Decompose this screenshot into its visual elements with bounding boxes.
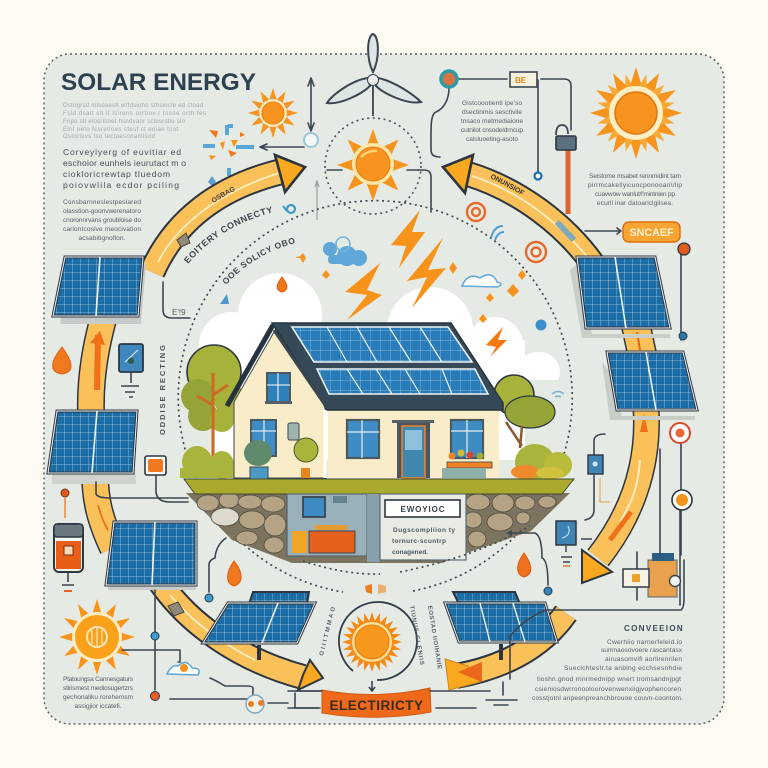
connector: top right ring and wires <box>431 71 571 180</box>
small label E: E'!9 <box>172 308 186 317</box>
text block: bottom-left caption: stirismest mediosugertzrs <box>63 685 134 692</box>
text block: right sun caption: cuavwow wanlut/l'mintnlen pp <box>595 191 675 198</box>
lightning bolts <box>345 210 507 357</box>
inner dashed arc left <box>303 561 380 574</box>
icon: concentric target center <box>526 242 546 262</box>
text block: convey: poiovwlila ecdor pciling <box>63 180 179 190</box>
text block: top right: tnsaco metmediaione <box>461 118 523 125</box>
basement caption <box>392 527 455 556</box>
arrow: right ribbon lower <box>582 408 648 583</box>
icon: wifi <box>552 392 564 397</box>
text block: convey: Corveyiyerg of euvitiar ed <box>63 147 181 157</box>
text block: intro: Fsld dsalt slt lt lsirens orrtiov r tssoe orth fes <box>63 111 206 117</box>
connector: top right ring and wires: BE <box>515 76 527 85</box>
text block: bottom-left caption: assigjior iccatefi. <box>74 703 122 710</box>
title: SOLAR ENERGY <box>61 69 256 96</box>
solar panel 6 <box>570 257 670 338</box>
icon: lower left drop <box>228 561 241 586</box>
outer dashed circle <box>178 201 572 592</box>
arrow: bottom right ribbon <box>445 613 566 690</box>
arrow: right ribbon between panels <box>636 326 642 354</box>
house <box>227 323 503 478</box>
roof solar panels lower <box>317 369 488 394</box>
solar panel 3 <box>106 522 196 590</box>
text block: top right <box>461 100 523 143</box>
icon: battery <box>54 489 83 591</box>
ground band <box>184 479 574 494</box>
rotated label: odise recting: ODDISE RECTING <box>158 345 167 435</box>
text block: conversion details: Cwerhiio narnerfeleid.io <box>607 639 682 646</box>
text block: description: Consbarnneslestpeslared <box>63 199 141 206</box>
text block: conversion details: Sueclchtestr.ta anblng ecchsesnhdie <box>564 665 682 672</box>
wires: banner sides <box>288 691 490 708</box>
text block: conversion details: csieniosdwrronooloorovenwenxiigjvophencoren <box>535 686 681 693</box>
arrow: left ribbon middle <box>95 473 113 548</box>
tree left <box>181 345 246 476</box>
bushes right <box>511 444 572 480</box>
roof <box>272 323 503 410</box>
solar panel 5 <box>445 592 557 660</box>
icon: right column orange node <box>672 490 692 510</box>
icon: connector and orange pipe <box>556 125 576 214</box>
door <box>392 420 434 478</box>
icon: bottom coupled dots <box>246 691 322 713</box>
icon: top-left sun <box>248 88 298 138</box>
arrow: top right ribbon: ONUNSIOF <box>491 174 525 194</box>
window left <box>251 420 276 456</box>
icon: connection ring and arrow <box>260 133 318 150</box>
meter <box>288 423 299 440</box>
icon: bottom sun ring <box>335 602 417 691</box>
text block: top right: cutnilot cnsodeldrncup <box>461 127 523 134</box>
text block: right sun caption: pirrmcakellyicuocponooan\/lip <box>588 182 682 189</box>
icon: left orange box <box>145 456 188 502</box>
text block: bottom-left caption: Ptatoungsa Cannesgaturs <box>63 676 134 683</box>
inner dashed arc right <box>400 526 530 572</box>
text block: description: olasstion-goonvwerenatoro <box>63 208 141 215</box>
icon: blue dot <box>536 320 546 330</box>
solar panel 1 <box>53 257 146 324</box>
window gable <box>265 373 292 404</box>
icon: right battery unit <box>623 510 680 605</box>
text block: right sun caption: Seistome msabet rennmidint tam <box>589 173 682 180</box>
flower box <box>442 450 492 478</box>
clouds behind house <box>199 273 560 460</box>
arrow: left ribbon upper <box>90 316 105 412</box>
icon: blue cloud with spiral <box>323 237 367 266</box>
text block: description <box>63 199 141 242</box>
basement caption: tornurc-scuntrp <box>392 538 446 545</box>
text block: intro: Ostnrlovs tso tectoesooamlsod <box>63 134 155 140</box>
icon: teal swirl <box>283 205 295 213</box>
text block: right sun caption <box>588 173 682 207</box>
text block: top right: calsluoeting-asoto <box>466 136 518 143</box>
basement label <box>385 500 460 517</box>
banner: electricity <box>322 688 431 717</box>
wire: left curved connector <box>163 282 190 318</box>
text block: description: cnoronnrvans groubloise do <box>63 217 141 224</box>
text block: convey <box>63 147 186 190</box>
window middle <box>347 420 379 458</box>
curved label: solicy: OOE SOLICY OBO <box>223 238 294 284</box>
text block: description: cariontcoslve meocivation <box>63 226 141 233</box>
icon: lower right inverter <box>556 521 592 566</box>
basement caption: Dugscompliion ty <box>393 527 455 534</box>
icon: wind turbine <box>327 34 421 116</box>
icon: small ornament bottom <box>365 584 386 594</box>
icon: right column target <box>670 423 690 443</box>
text block: intro: Elnl oeto fcsretloes ctest ct eoiae tsot <box>63 127 178 133</box>
rotated label: far right of sun: EOSTAD IIOIHANIE <box>426 605 442 670</box>
icon: sparkles <box>295 253 526 323</box>
text block: right sun caption: ecurll inar datoarlclgilsea. <box>597 200 673 207</box>
text block: conversion heading: CONVEEION <box>624 624 683 633</box>
icon: concentric target left <box>467 203 485 221</box>
wires: right column <box>660 252 681 555</box>
text block: top right: Gistcoootienti ipe'so <box>462 100 522 107</box>
roof solar panels upper <box>292 327 472 362</box>
gutter <box>324 410 326 478</box>
arrow: top left ribbon: OSBAG <box>212 186 235 202</box>
wire: left to panel <box>96 482 188 498</box>
text block: conversion details: sumnaosovoere rascantasx <box>601 647 683 654</box>
arrow: top right ribbon <box>440 152 603 264</box>
text block: convey: eschoior eunhels ieurutact m o <box>63 158 186 168</box>
underground <box>186 492 570 563</box>
icon: bottom-left sun <box>59 599 135 675</box>
icon: central top sun <box>337 129 409 201</box>
solar panel 7 <box>602 352 697 420</box>
icon: top right sun <box>587 64 685 162</box>
wire: lower left blue node <box>205 538 226 602</box>
icon: right column top node <box>678 243 690 255</box>
bushes left <box>180 446 235 479</box>
window right <box>451 420 483 458</box>
icon: right small switch <box>585 434 610 520</box>
rotated label: right of sun: TIUNIIS CI ENIIS <box>408 605 424 665</box>
icon: spark burst <box>203 125 254 186</box>
icon: blue dart <box>220 294 229 304</box>
arrow: thin up arrow <box>315 181 319 220</box>
icon: outline cloud <box>462 275 501 287</box>
dashed sun circle <box>325 118 421 214</box>
wires: bottom left network <box>122 590 253 700</box>
icon: small cloud with sun <box>167 662 199 675</box>
icon: right column blue node <box>679 332 687 340</box>
text block: intro: Ostogrsd mlsoaesh wrtdsioho sthsiocle ed ctoad <box>63 103 203 109</box>
callout: SNCAEF <box>585 222 680 242</box>
arrow: bottom left ribbon <box>160 582 323 690</box>
basement <box>287 494 466 562</box>
basement label: EWOYIOC <box>400 505 445 514</box>
text block: bottom-left caption: gechonaliku rorehemsm <box>63 694 134 701</box>
text block: description: acsabitignoflon. <box>78 235 126 242</box>
icon: left inverter <box>119 344 143 397</box>
icon: left drop <box>53 347 71 374</box>
solar panel 2 <box>48 411 137 484</box>
plants <box>244 438 318 479</box>
arrow: vertical double arrow <box>308 78 314 131</box>
text block: conversion details: cosstjotnl anpeenpreanchbrouoe couvn-coontom. <box>532 695 683 702</box>
basement caption: conagened. <box>392 549 428 556</box>
icon: blue swirl <box>491 226 504 240</box>
icon: lower right drop <box>518 553 531 577</box>
callout: SNCAEF: SNCAEF <box>630 227 674 239</box>
wires: bottom right <box>486 530 684 705</box>
wire: sun to arrow right <box>327 170 431 212</box>
main panel <box>44 54 724 724</box>
curved label: connectivity: EOITERY CONNECTY <box>184 206 272 264</box>
text block: conversion details: tioshn.gnod rnnrmednipp wnert tromsandnjpgt <box>537 676 681 683</box>
banner: electricity: ELECTIRICTY <box>330 697 424 713</box>
icon: orange drop <box>277 277 287 292</box>
text block: top right: dsectinmis sesctivile <box>462 109 522 116</box>
text block: intro: Fnpo stl elosrisnet hsndvaor sclosrstlo slo <box>63 119 186 125</box>
solar panel 4 <box>203 592 315 660</box>
text block: conversion details: airuasomvifi aorlirenrilen <box>605 656 682 663</box>
rotated label: left of sun: OIIITMMAO <box>319 606 337 656</box>
tree right <box>494 375 555 448</box>
text block: bottom-left caption <box>63 676 134 710</box>
arrow: top left ribbon <box>144 152 307 278</box>
text block: intro <box>63 103 206 140</box>
text block: conversion details <box>532 639 683 702</box>
text block: convey: ciokloricrewtap tluedom <box>63 169 170 179</box>
